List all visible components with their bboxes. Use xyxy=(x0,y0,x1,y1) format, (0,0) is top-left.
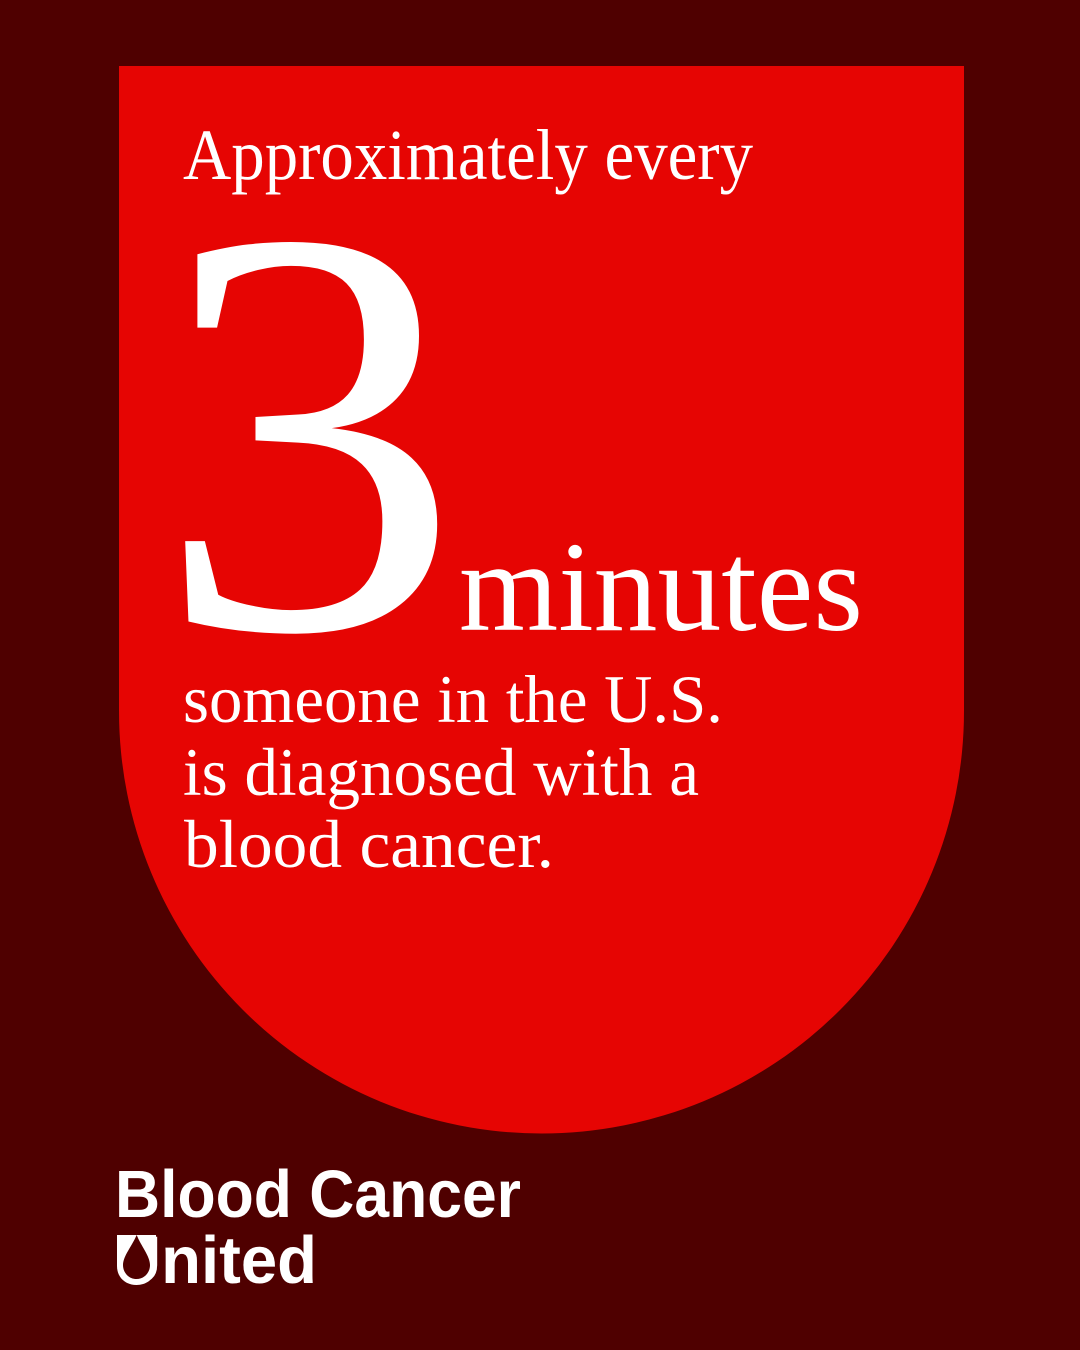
unit: minutes: minutes xyxy=(459,516,863,658)
heading: approximately every: Approximately every xyxy=(183,115,753,195)
text block: diagnosis statement: is diagnosed with a xyxy=(183,734,699,810)
big number: 3: 3 xyxy=(156,109,461,755)
logo: Blood Cancer United: Blood Cancer xyxy=(115,1157,521,1232)
icon: U with blood drop xyxy=(117,1235,156,1285)
text block: diagnosis statement: someone in the U.S. xyxy=(183,661,723,737)
panel: red shield xyxy=(119,66,964,1134)
logo: Blood Cancer United: United xyxy=(114,1223,317,1298)
logo: Blood Cancer United xyxy=(114,1157,521,1298)
text block: diagnosis statement xyxy=(183,661,723,882)
text block: diagnosis statement: blood cancer. xyxy=(184,806,554,882)
